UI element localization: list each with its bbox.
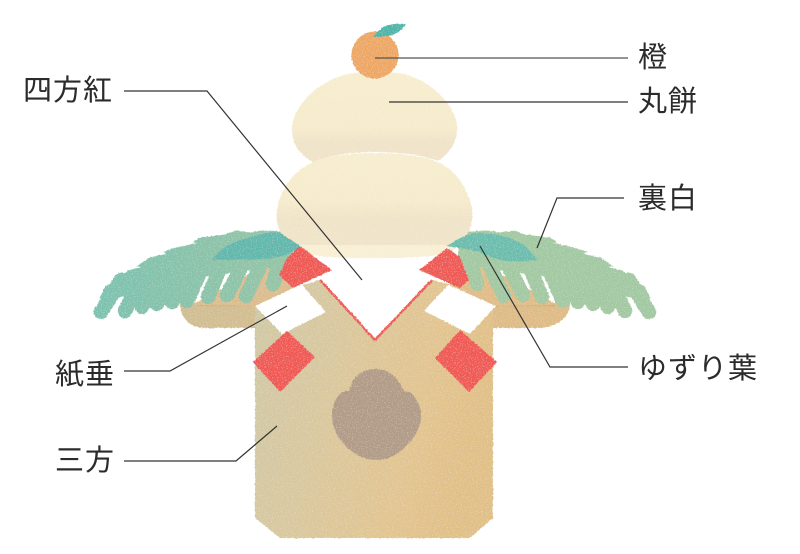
yuzuriha leaf left (212, 232, 302, 260)
sanbo tray (180, 303, 570, 328)
label: 四方紅: 四方紅 (23, 74, 113, 107)
yuzuriha leaf right (447, 233, 538, 261)
orange leaf (373, 24, 406, 37)
leader line: 三方 (124, 426, 277, 461)
label: 丸餅: 丸餅 (638, 85, 698, 118)
leader line: ゆずり葉 (480, 246, 628, 367)
red diamond right (435, 330, 497, 392)
sanbo base body (255, 280, 493, 538)
shihobeni corner top left (279, 246, 332, 288)
lower mochi (276, 153, 472, 258)
label: 紙垂: 紙垂 (55, 358, 115, 391)
leader line: 紙垂 (124, 306, 287, 371)
leader line: 丸餅 (389, 101, 628, 103)
label: ゆずり葉: ゆずり葉 (638, 352, 758, 385)
shide paper left (255, 285, 326, 334)
label: 三方: 三方 (55, 444, 115, 477)
red diamond left (253, 331, 315, 392)
label: 橙: 橙 (638, 41, 668, 74)
leader line: 裏白 (537, 198, 624, 248)
shide paper right (424, 285, 496, 334)
urajiro fern left (100, 231, 292, 312)
leader line: 橙 (375, 57, 628, 59)
shihobeni red border (320, 280, 432, 340)
leader line: 四方紅 (124, 91, 362, 280)
fern stems behind fronds (192, 262, 558, 306)
urajiro fern right (458, 231, 650, 312)
upper mochi (292, 72, 457, 162)
shihobeni corner top right (419, 248, 469, 288)
label: 裏白: 裏白 (638, 182, 698, 215)
white shihobeni paper centre (320, 250, 432, 340)
lower mochi light band (295, 245, 456, 258)
orange (352, 32, 398, 78)
base hole (332, 369, 421, 460)
illustration: kagami mochi on sanbo (100, 24, 650, 538)
